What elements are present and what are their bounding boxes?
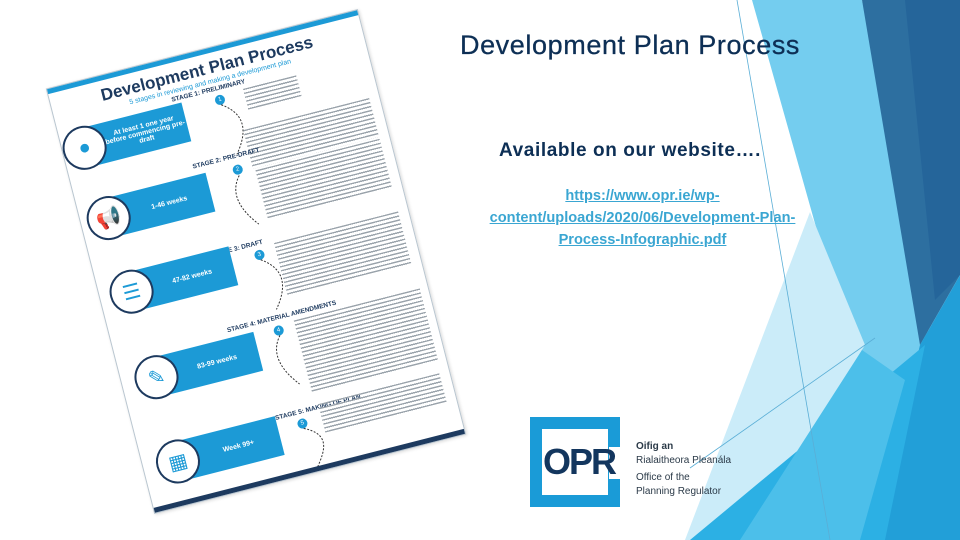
infographic document thumbnail: 2 xyxy=(235,166,240,173)
link: https://www.opr.ie/wp- xyxy=(565,188,720,204)
logo: OPR: Planning Regulator xyxy=(636,486,721,497)
stage 4: STAGE 4: MATERIAL AMENDMENTS xyxy=(226,300,337,334)
infographic document thumbnail: 4 xyxy=(276,327,281,334)
title: Development Plan Process xyxy=(460,30,800,60)
infographic document thumbnail: At least 1 one year before commencing pre-draft xyxy=(105,115,186,146)
infographic document thumbnail: 📢 xyxy=(94,205,124,232)
link: Process-Infographic.pdf xyxy=(559,232,726,248)
stage 2: STAGE 2: PRE-DRAFT xyxy=(192,147,260,171)
infographic document thumbnail: 3 xyxy=(257,252,262,258)
infographic document thumbnail: ✎ xyxy=(146,365,167,390)
infographic document thumbnail: 1 xyxy=(218,97,222,103)
logo: OPR: Rialaitheora Pleanála xyxy=(636,455,731,466)
stage 5: STAGE 5: MAKING OF PLAN xyxy=(275,393,362,422)
infographic document thumbnail: 1-46 weeks xyxy=(150,195,188,211)
logo: OPR xyxy=(530,417,732,507)
subtitle text: Available on our website…. xyxy=(499,140,761,161)
infographic document thumbnail: Week 99+ xyxy=(222,439,255,453)
logo: OPR: OPR xyxy=(543,441,615,482)
infographic document thumbnail: ☰ xyxy=(120,279,143,305)
doc title: Development Plan Process xyxy=(99,33,315,105)
infographic document thumbnail: 5 xyxy=(300,420,305,427)
infographic document thumbnail: 47-82 weeks xyxy=(171,268,213,285)
infographic document thumbnail: 83-99 weeks xyxy=(196,353,238,370)
infographic document thumbnail: 5 stages in reviewing and making a development plan xyxy=(129,58,292,106)
infographic document thumbnail: ▦ xyxy=(166,449,190,475)
link xyxy=(490,188,796,248)
stage 3: STAGE 3: DRAFT xyxy=(210,239,264,259)
stage 1: STAGE 1: PRELIMINARY xyxy=(171,78,246,104)
logo: OPR: Office of the xyxy=(636,472,690,483)
infographic document thumbnail: ● xyxy=(76,135,93,159)
logo: OPR: Oifig an xyxy=(636,441,673,452)
link: content/uploads/2020/06/Development-Plan- xyxy=(490,210,795,226)
infographic document thumbnail xyxy=(46,9,466,514)
